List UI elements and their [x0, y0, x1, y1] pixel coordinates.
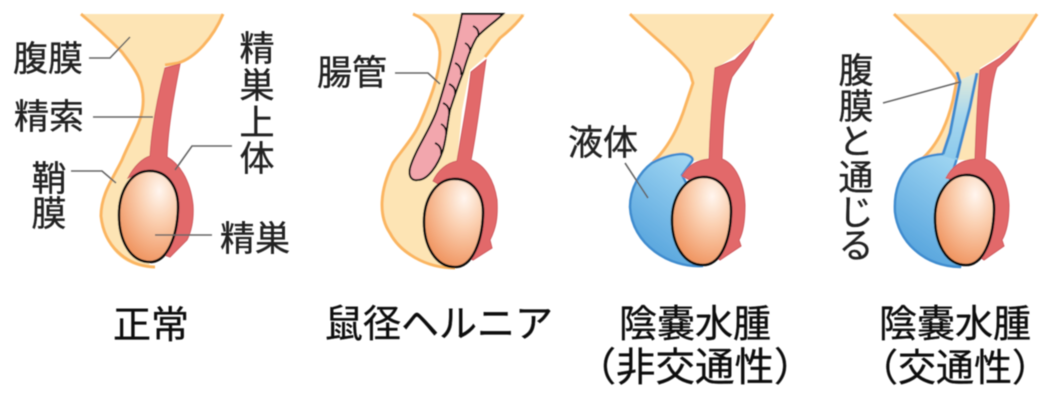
leader line: [883, 82, 960, 103]
leader lines: [71, 37, 232, 235]
title: non-communicating hydrocele: [576, 304, 814, 390]
label: communicates with peritoneum: 膜: [838, 88, 874, 127]
spermatic cord and epididymis: [946, 40, 1020, 260]
title: normal: 正常: [113, 305, 189, 347]
label: tunica vaginalis: 鞘: [31, 160, 67, 199]
peritoneum body: [81, 14, 223, 267]
peritoneum body: [382, 14, 525, 268]
title: inguinal hernia: 鼠径ヘルニア: [325, 304, 553, 346]
title: non-communicating hydrocele: 陰嚢水腫: [619, 304, 771, 346]
peritoneum body: [630, 14, 773, 163]
label: epididymis: 体: [239, 140, 275, 179]
title: communicating hydrocele: （交通性）: [860, 348, 1050, 390]
label: epididymis: 巣: [239, 67, 275, 106]
label: intestine: 腸管: [317, 54, 387, 93]
title: communicating hydrocele: 陰嚢水腫: [879, 304, 1031, 346]
label: communicates with peritoneum: と: [838, 123, 874, 162]
title: non-communicating hydrocele: （非交通性）: [576, 346, 814, 390]
label: fluid: 液体: [568, 124, 638, 163]
panel: non-communicating hydrocele: [568, 14, 814, 390]
label: tunica vaginalis: [31, 160, 67, 234]
intestine: [410, 14, 503, 180]
testis: [672, 177, 731, 265]
spermatic cord and epididymis: [433, 60, 497, 260]
panel: normal: [13, 14, 290, 347]
label: testis: 精巣: [220, 220, 290, 259]
label: epididymis: 精: [239, 30, 275, 69]
label: communicates with peritoneum: 腹: [838, 52, 874, 91]
label: communicates with peritoneum: る: [838, 227, 874, 266]
leader line: [625, 163, 648, 198]
panel: communicating hydrocele: [838, 14, 1050, 390]
label: peritoneum: 腹膜: [13, 40, 83, 79]
panel: inguinal hernia: [317, 14, 553, 346]
testis: [119, 171, 178, 262]
testis: [424, 179, 483, 267]
spermatic cord and epididymis: [128, 64, 193, 257]
peritoneum body: [894, 14, 1037, 160]
label: epididymis: [239, 30, 275, 179]
label: communicates with peritoneum: じ: [838, 194, 874, 233]
label: spermatic cord: 精索: [14, 98, 84, 137]
fluid sac: [630, 154, 705, 266]
spermatic cord and epididymis: [682, 40, 755, 260]
label: epididymis: 上: [239, 104, 275, 143]
label: tunica vaginalis: 膜: [31, 195, 67, 234]
title: communicating hydrocele: [860, 304, 1050, 390]
label: communicates with peritoneum: [838, 52, 874, 266]
testis: [935, 175, 994, 265]
communicating fluid sac: [895, 72, 977, 267]
leader line: [395, 73, 440, 84]
label: communicates with peritoneum: 通: [838, 159, 874, 198]
